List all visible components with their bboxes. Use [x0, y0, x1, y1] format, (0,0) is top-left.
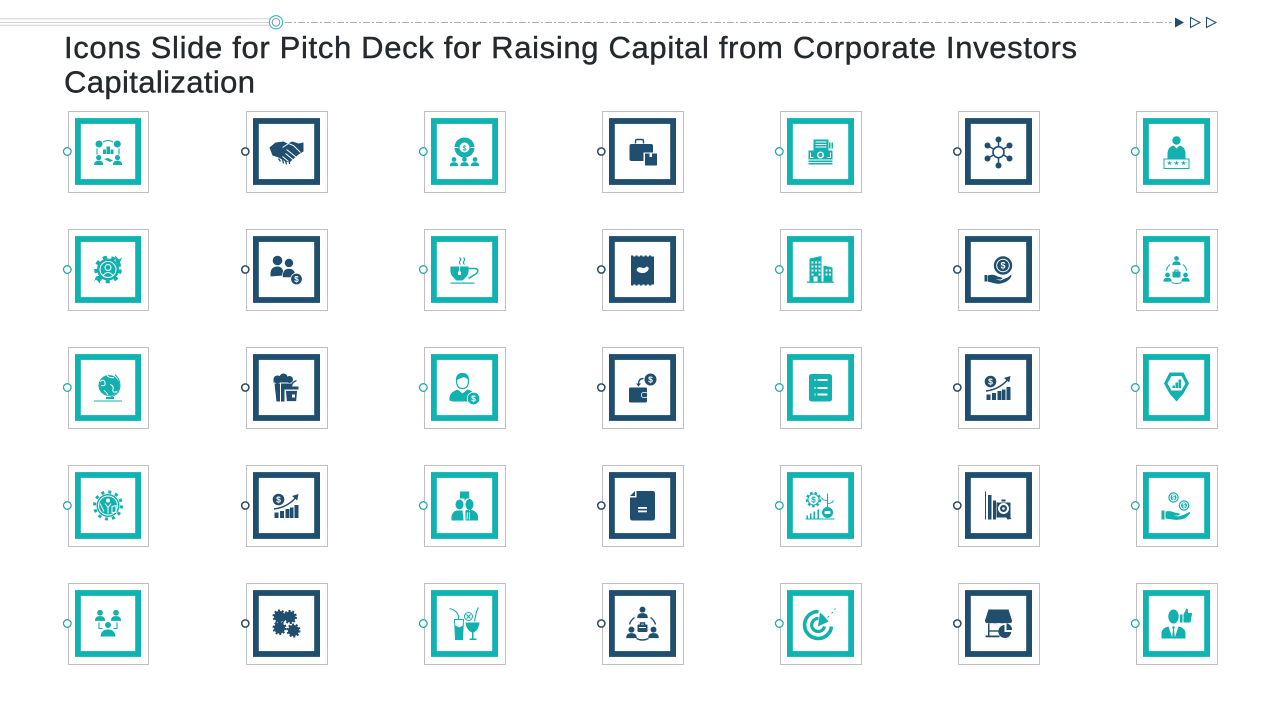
card: hub network: [954, 112, 1040, 192]
icon: office buildings: [807, 256, 834, 283]
icon: gear and wrench with person: [94, 256, 122, 284]
card: wallet with dollar: [598, 348, 684, 428]
card: discussion: [420, 466, 506, 546]
card: hand with coin: [954, 230, 1040, 310]
icon: document with equals: [630, 491, 655, 520]
card: investor man: [420, 348, 506, 428]
icon: hand with coins: $: [1172, 496, 1176, 502]
arrows: header triangles: [1175, 18, 1216, 28]
icon: gear, plant and savings: $: [811, 496, 816, 504]
icon: hub network: [984, 136, 1012, 168]
icon: man with thumbs up: [1162, 608, 1192, 638]
card: hand with coins: [1132, 466, 1218, 546]
card: gear with community: [64, 466, 148, 546]
card: rated representative: [1132, 112, 1218, 192]
icon: diamond pin with chart: [1164, 372, 1189, 402]
title: Icons Slide for Pitch Deck for Raising Capital from Corporate Investors: [64, 30, 1077, 65]
icon: wallet with dollar: $: [648, 374, 653, 384]
icon: cash stack with documents: [808, 140, 833, 164]
card: gear and wrench: [64, 230, 148, 310]
title: [64, 30, 1077, 100]
header line decoration: [0, 16, 1172, 29]
card: puzzle gears: [242, 584, 328, 664]
card: growth plant: [776, 466, 862, 546]
card: shop with pie chart: [954, 584, 1040, 664]
icon: funding lifebuoy with investors: $: [463, 145, 467, 152]
title: Capitalization: [64, 64, 255, 100]
card: drinks: [420, 584, 506, 664]
card: handshake: [242, 112, 328, 192]
card: briefcase and box: [598, 112, 684, 192]
card: globe: [64, 348, 148, 428]
icon: briefcase and box: [630, 140, 658, 166]
icon: team with briefcase: [626, 607, 659, 640]
icon: dollar growth chart: $: [276, 494, 281, 504]
icon: corporate network: [94, 140, 122, 165]
icon: tea cup: [450, 258, 478, 284]
card: location pin: [1132, 348, 1218, 428]
icon: three people with arrows: [95, 610, 121, 636]
card: chart with badge: [954, 466, 1040, 546]
card: popcorn and drink: [242, 348, 328, 428]
icon: coffee bag: [631, 256, 654, 286]
icon: checklist document: [809, 374, 832, 402]
card: funding lifebuoy: [420, 112, 506, 192]
icon: target with arrow: [805, 608, 836, 638]
card: target: [776, 584, 862, 664]
card: growth chart: [954, 348, 1040, 428]
card: cash stack: [776, 112, 862, 192]
icon: handshake: [270, 142, 304, 164]
card: growth chart two: [242, 466, 328, 546]
icon: shop with pie chart: [985, 610, 1012, 638]
icon: investor with dollar coin: $: [471, 394, 476, 404]
icon: two people with speech bubble: [452, 492, 478, 520]
icon: hand with coins: $: [1182, 504, 1186, 510]
icon: two people with dollar coin: $: [294, 275, 299, 284]
icon: person at desk with stars: [1164, 136, 1189, 168]
card: tea cup: [420, 230, 506, 310]
icon: hand holding coin: $: [1000, 261, 1006, 271]
icon: hand with coins: [1162, 492, 1190, 520]
card: clients with dollar: [242, 230, 328, 310]
card: checklist: [776, 348, 862, 428]
card: document: [598, 466, 684, 546]
icon: dollar growth chart: $: [988, 376, 993, 386]
card: team with briefcase two: [598, 584, 684, 664]
card: approval: [1132, 584, 1218, 664]
card: office buildings: [776, 230, 862, 310]
card: coffee bag: [598, 230, 684, 310]
icon: globe on stand: [94, 374, 122, 402]
icon: gear with people: [94, 492, 122, 519]
icon: puzzle gears: [274, 610, 300, 636]
icon: chart with badge: [985, 492, 1012, 520]
card: team flow: [64, 584, 148, 664]
icon: popcorn and drink: [274, 374, 298, 402]
icon: team with briefcase: [1163, 256, 1190, 284]
card: team with briefcase: [1132, 230, 1218, 310]
card: corporate network: [64, 112, 148, 192]
icon: cocktail drinks: [450, 608, 480, 640]
